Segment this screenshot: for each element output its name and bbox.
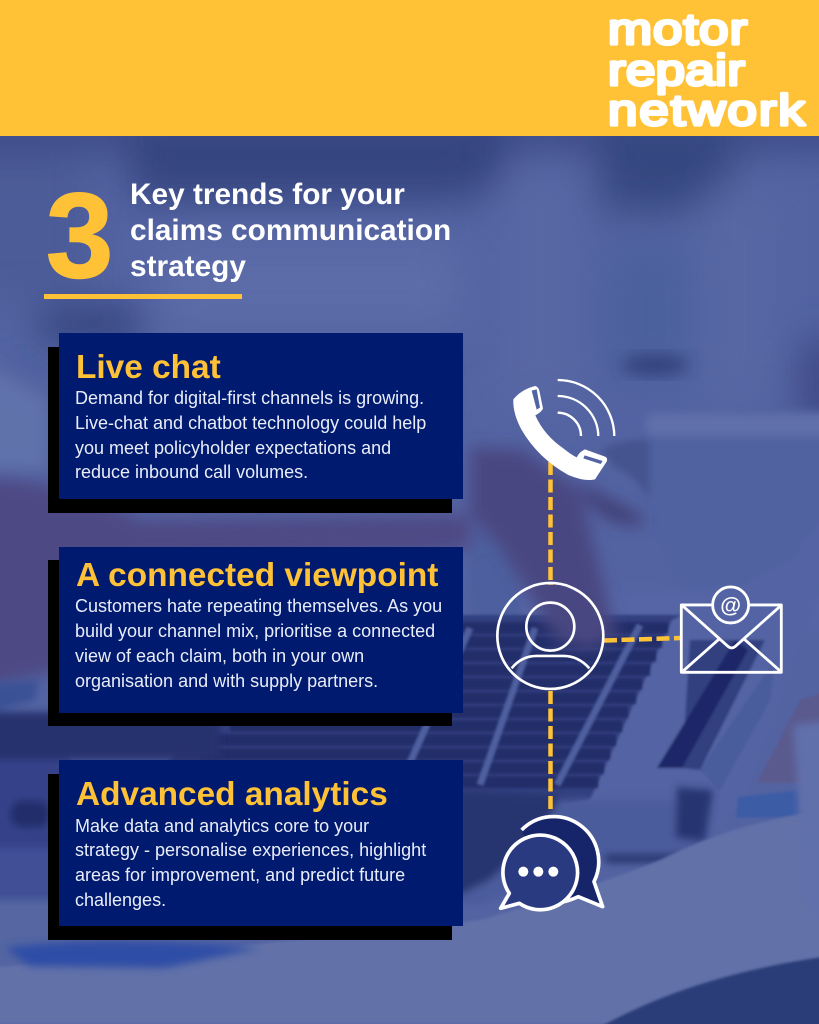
text: connected viewpoint body: view of each claim, both in your own	[75, 646, 364, 666]
panel: advanced analytics	[48, 760, 463, 940]
text: advanced analytics body	[75, 816, 426, 910]
laptop body	[150, 510, 819, 850]
logo	[608, 5, 806, 135]
text: connected viewpoint body: organisation and with supply partners.	[75, 671, 378, 691]
icon: envelope	[681, 587, 782, 672]
title	[130, 178, 451, 283]
text: connected viewpoint body	[75, 596, 442, 691]
text: advanced analytics body: areas for improvement, and predict future	[75, 865, 405, 885]
logo: repair	[608, 46, 745, 95]
title: Key trends for your	[130, 178, 405, 211]
text: live chat body: reduce inbound call volumes.	[75, 462, 308, 482]
title: strategy	[130, 250, 246, 283]
hands	[0, 447, 643, 690]
heading: a connected viewpoint: A connected viewpoint	[76, 557, 438, 594]
panel: a connected viewpoint	[48, 547, 463, 726]
icon: user	[497, 583, 603, 689]
text: advanced analytics body: strategy - personalise experiences, highlight	[75, 840, 426, 860]
icon: envelope: @	[720, 594, 741, 618]
logo: motor	[608, 5, 747, 54]
title: claims communication	[130, 214, 451, 247]
text: connected viewpoint body: Customers hate repeating themselves. As you	[75, 596, 442, 616]
icon: phone	[513, 380, 614, 480]
text: live chat body: you meet policyholder expectations and	[75, 438, 391, 458]
dashed connectors	[550, 462, 681, 813]
panel: live chat	[48, 333, 463, 513]
heading: advanced analytics: Advanced analytics	[76, 776, 388, 813]
text: live chat body: Demand for digital-first channels is growing.	[75, 388, 424, 408]
mug	[600, 410, 819, 600]
text: advanced analytics body: Make data and analytics core to your	[75, 816, 369, 836]
logo: network	[608, 86, 806, 135]
desk	[0, 810, 819, 1024]
heading: live chat: Live chat	[76, 349, 221, 386]
text: live chat body	[75, 388, 426, 482]
text: advanced analytics body: challenges.	[75, 890, 166, 910]
title underline	[44, 294, 242, 299]
header band	[0, 0, 819, 136]
text: live chat body: Live-chat and chatbot technology could help	[75, 413, 426, 433]
icon: chat bubbles	[501, 817, 603, 910]
text: connected viewpoint body: build your channel mix, prioritise a connected	[75, 621, 435, 641]
keyboard keys	[172, 628, 668, 782]
big number 3: 3	[46, 167, 113, 303]
